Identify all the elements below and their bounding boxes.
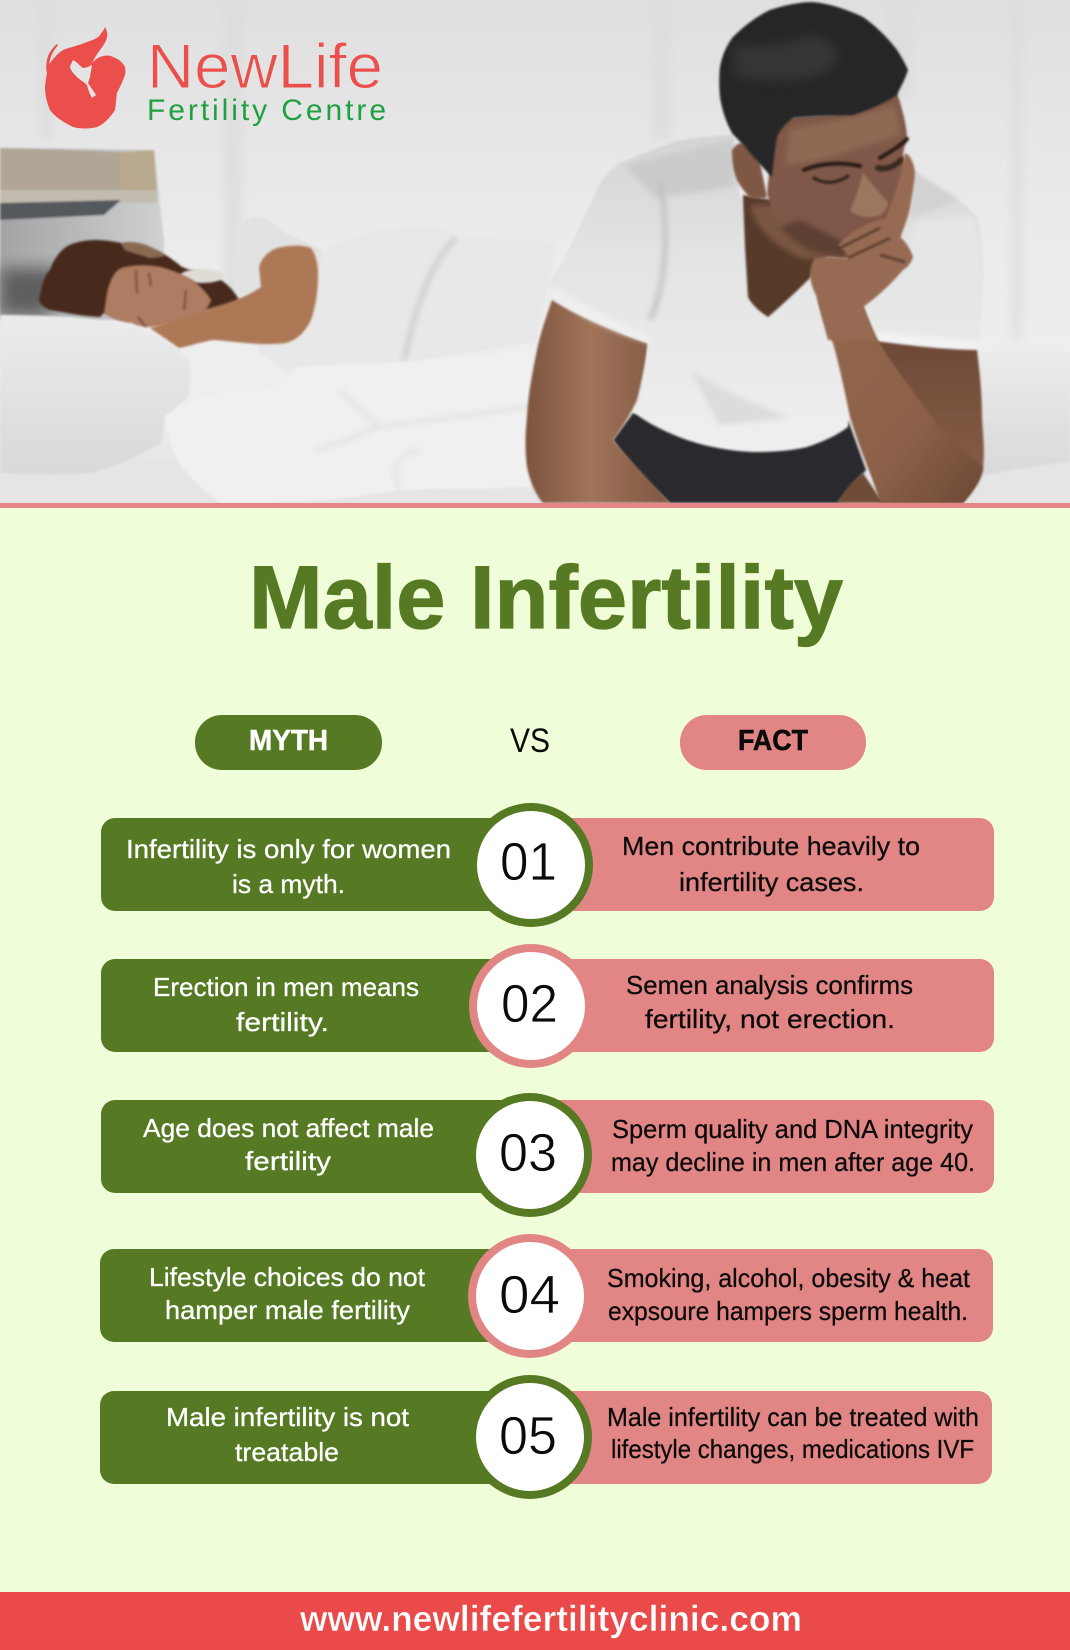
fact pill xyxy=(680,715,866,770)
number badge 03: 03 xyxy=(499,1123,557,1183)
number badge 04 xyxy=(468,1234,592,1358)
small pillow xyxy=(190,341,212,391)
number badge 05: 05 xyxy=(499,1406,557,1466)
myth vs fact header xyxy=(195,715,866,770)
row 4 xyxy=(100,1234,993,1358)
man's neck and chest xyxy=(743,195,830,317)
man's shorts xyxy=(613,413,866,503)
myth bar 4: Lifestyle choices do not xyxy=(149,1262,426,1292)
man's right upper arm xyxy=(870,340,986,503)
man's face xyxy=(767,93,907,258)
footer bar with website: www.newlifefertilityclinic.com xyxy=(299,1598,802,1639)
fact bar 2: Semen analysis confirms xyxy=(626,970,913,1000)
bed surface xyxy=(0,460,1070,503)
duvet xyxy=(164,410,531,502)
fact bar 1 xyxy=(531,818,994,911)
fact pill: FACT xyxy=(738,725,808,757)
number badge 05 xyxy=(468,1375,592,1499)
fact bar 1: Men contribute heavily to xyxy=(622,831,920,861)
myth bar 4 xyxy=(100,1249,531,1342)
pink divider strip xyxy=(0,503,1070,508)
myth bar 1: Infertility is only for women xyxy=(126,834,451,864)
myth pill: MYTH xyxy=(249,725,328,757)
man's eyebrows and eyes xyxy=(804,139,907,182)
myth bar 1 xyxy=(101,818,531,911)
fact bar 4: Smoking, alcohol, obesity & heat xyxy=(607,1263,971,1293)
fact bar 2: fertility, not erection. xyxy=(645,1004,895,1034)
logo wordmark NewLife: NewLife xyxy=(147,32,383,102)
header photo: sleeping woman and worried man on a bed xyxy=(0,0,1070,503)
man's forearm xyxy=(817,295,983,503)
man's t-shirt xyxy=(547,135,983,452)
row 2 xyxy=(101,944,994,1068)
myth bar 2: Erection in men means xyxy=(153,972,419,1002)
row 3 xyxy=(101,1093,994,1217)
logo: NewLife Fertility Centre xyxy=(45,27,386,128)
myth bar 2: fertility. xyxy=(236,1007,329,1037)
myth bar 4: hamper male fertility xyxy=(165,1295,410,1325)
myth bar 5: Male infertility is not xyxy=(166,1402,410,1432)
logo icon: mother and baby xyxy=(45,27,125,128)
man's ear xyxy=(732,143,767,199)
man's nose xyxy=(850,173,888,217)
number badge 01 xyxy=(469,803,593,927)
row 5 xyxy=(100,1375,992,1499)
title: Male Infertility xyxy=(249,547,843,647)
myth bar 1: is a myth. xyxy=(232,869,345,899)
vs label: VS xyxy=(510,722,550,760)
right side pillows xyxy=(984,411,1070,475)
number badge 03 xyxy=(468,1093,592,1217)
man's hand on chin xyxy=(810,153,915,340)
bed headboard xyxy=(0,148,164,320)
man's hair xyxy=(719,2,908,177)
woman's face xyxy=(104,265,211,327)
fact bar 5: lifestyle changes, medications IVF xyxy=(611,1434,974,1464)
fact bar 4: expsoure hampers sperm health. xyxy=(608,1296,968,1326)
myth bar 3: fertility xyxy=(245,1146,331,1176)
woman's hair xyxy=(39,240,239,317)
fact bar 5 xyxy=(531,1391,992,1484)
myth bar 3 xyxy=(101,1100,531,1193)
fact bar 3 xyxy=(531,1100,994,1193)
row 1 xyxy=(101,803,994,927)
woman's shirt sleeve xyxy=(246,218,319,292)
fact bar 3: may decline in men after age 40. xyxy=(611,1147,975,1177)
fact bar 4 xyxy=(531,1249,993,1342)
woman's arm xyxy=(150,246,318,348)
myth bar 3: Age does not affect male xyxy=(143,1113,434,1143)
number badge 01: 01 xyxy=(500,832,557,892)
footer bar with website xyxy=(0,1592,1070,1650)
number badge 02: 02 xyxy=(501,974,558,1034)
woman's hair flower xyxy=(180,269,224,283)
man's left arm xyxy=(526,300,670,503)
logo tagline Fertility Centre: Fertility Centre xyxy=(147,94,386,127)
woman's blanket crease xyxy=(404,238,456,360)
number badge 04: 04 xyxy=(499,1265,560,1325)
man's knee xyxy=(837,473,883,503)
fact bar 2 xyxy=(531,959,994,1052)
fact bar 5: Male infertility can be treated with xyxy=(607,1402,979,1432)
myth pill xyxy=(195,715,382,770)
fact bar 3: Sperm quality and DNA integrity xyxy=(612,1114,973,1144)
woman's body under duvet xyxy=(257,226,557,372)
myth bar 5 xyxy=(100,1391,531,1484)
fact bar 1: infertility cases. xyxy=(679,867,864,897)
myth bar 5: treatable xyxy=(235,1437,339,1467)
number badge 02 xyxy=(469,944,593,1068)
myth bar 2 xyxy=(101,959,531,1052)
left big pillow xyxy=(0,315,195,474)
shirt shadows and folds xyxy=(547,140,982,425)
